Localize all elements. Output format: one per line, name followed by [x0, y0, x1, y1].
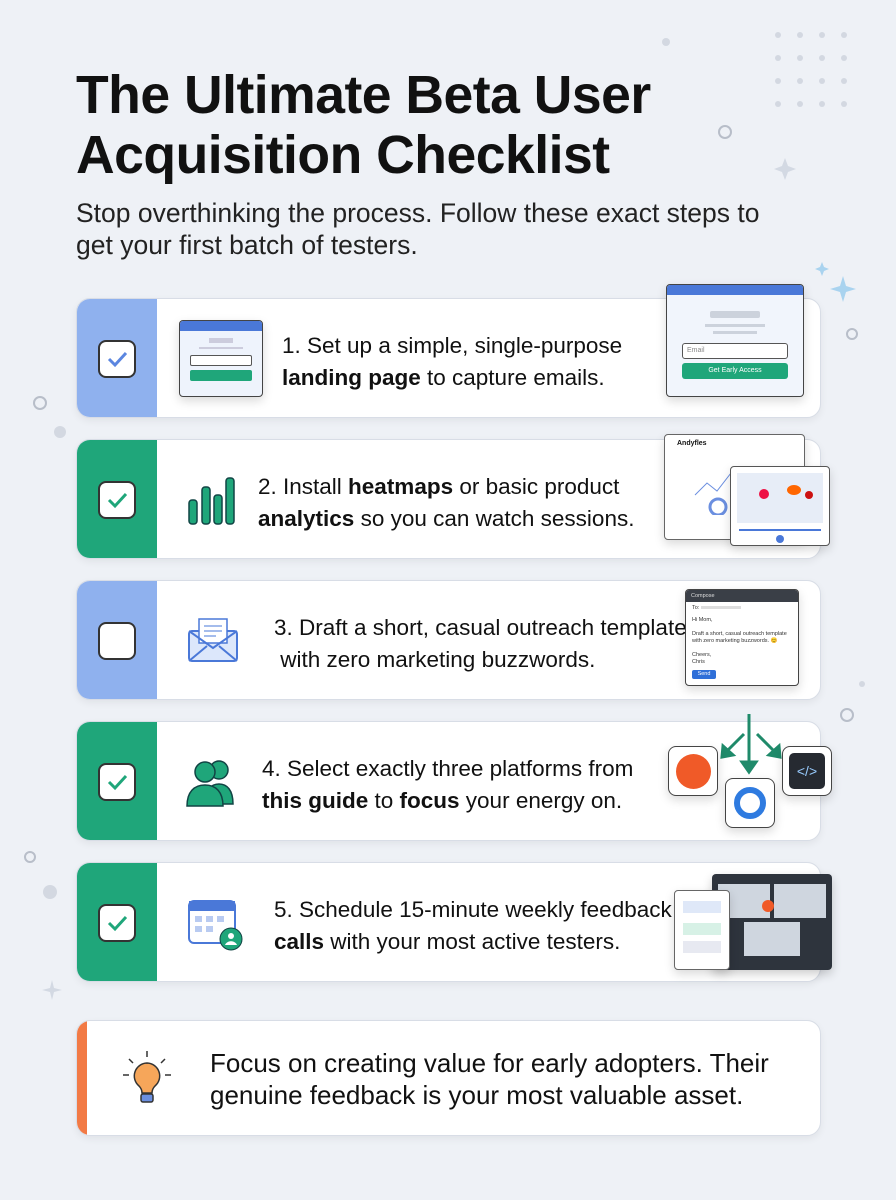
callout — [76, 1020, 821, 1136]
title: Acquisition Checklist — [76, 126, 610, 185]
text 2 — [258, 474, 634, 531]
card 2 — [76, 439, 821, 559]
mockup: analytics dashboard — [660, 434, 834, 554]
checkbox 5 — [98, 904, 136, 942]
checkbox 1 — [98, 340, 136, 378]
icon: lightbulb — [123, 1051, 171, 1103]
card 1 — [76, 298, 821, 418]
platform icons with arrows: </> — [797, 763, 817, 779]
subtitle: get your first batch of testers. — [76, 230, 418, 260]
checkbox 2 — [98, 481, 136, 519]
callout text: genuine feedback is your most valuable asset. — [210, 1080, 743, 1110]
icon: users — [186, 760, 234, 807]
callout text — [210, 1048, 769, 1110]
mockup: signup form: Get Early Access — [708, 367, 762, 374]
subtitle: Stop overthinking the process. Follow these exact steps to — [76, 198, 759, 228]
mockup: email compose: Chris — [692, 659, 705, 665]
mockup: analytics dashboard: Andyfles — [677, 440, 707, 447]
text 2: 2. Install heatmaps or basic product — [258, 474, 619, 499]
text 4: 4. Select exactly three platforms from — [262, 756, 633, 781]
checkbox 4 — [98, 763, 136, 801]
mockup: email compose — [685, 589, 799, 686]
text 5: calls with your most active testers. — [274, 929, 620, 954]
text 1: landing page to capture emails. — [282, 365, 605, 390]
title: The Ultimate Beta User — [76, 66, 651, 125]
text 4 — [262, 756, 633, 813]
mockup: email compose: Hi Mom, — [692, 617, 712, 623]
icon: bar chart — [188, 477, 235, 525]
text 4: this guide to focus your energy on. — [262, 788, 622, 813]
mockup: email compose: To: — [692, 605, 699, 611]
card 3 — [76, 580, 821, 700]
text 1 — [282, 333, 622, 390]
mockup: email compose: with zero marketing buzzwords. 😊 — [692, 638, 777, 644]
title — [76, 66, 651, 185]
mockup: email compose: Send — [698, 671, 710, 677]
mockup: email compose: Cheers, — [692, 652, 711, 658]
mockup: signup form — [666, 284, 804, 397]
text 3 — [274, 615, 687, 672]
text 3: with zero marketing buzzwords. — [280, 647, 595, 672]
text 2: analytics so you can watch sessions. — [258, 506, 634, 531]
mockup: email compose: Draft a short, casual outreach template — [692, 631, 787, 637]
text 3: 3. Draft a short, casual outreach template — [274, 615, 687, 640]
text 5: 5. Schedule 15-minute weekly feedback — [274, 897, 672, 922]
checkbox 3 — [98, 622, 136, 660]
text 5 — [274, 897, 672, 954]
text 1: 1. Set up a simple, single-purpose — [282, 333, 622, 358]
mockup: signup form: Email — [687, 347, 705, 354]
card 4 — [76, 721, 821, 841]
card 5 — [76, 862, 821, 982]
subtitle — [76, 198, 759, 260]
platform icons with arrows — [664, 714, 836, 836]
icon: envelope — [188, 618, 238, 662]
icon: calendar — [188, 900, 242, 950]
mockup: video call — [670, 874, 836, 980]
mockup: email compose: Compose — [691, 593, 715, 599]
callout text: Focus on creating value for early adopters. Their — [210, 1048, 769, 1078]
icon: landing page — [179, 320, 263, 397]
